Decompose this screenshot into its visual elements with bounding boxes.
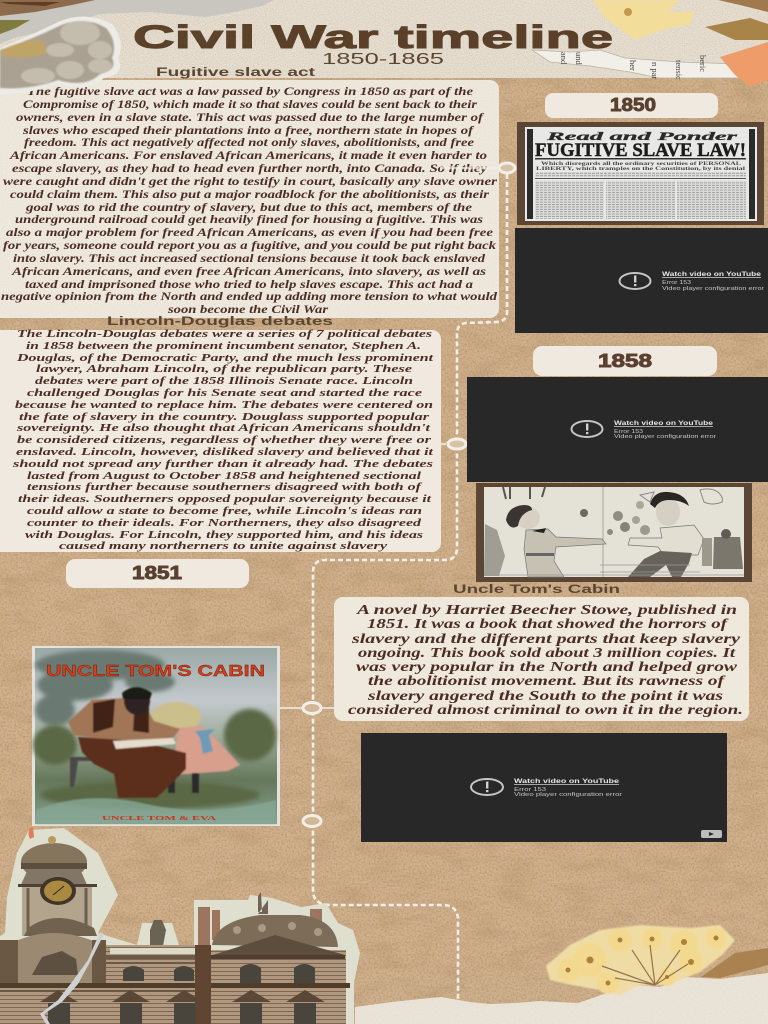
figure: Uncle Tom [68,687,186,798]
video embed: 1851 error: Video player configuration error [514,792,622,798]
text block: fugitive slave act body: The fugitive slave act was a law passed by Congress in 1850 as part of the [27,86,473,98]
video embed: 1850 error [515,228,768,333]
year label: 1851 [66,559,249,588]
collage: torn print scrap: and [559,52,569,65]
heading: Uncle Tom's Cabin: Uncle Tom's Cabin [453,584,620,596]
video embed: 1851 error [361,733,727,842]
figure: Lincoln [628,492,704,577]
text block: fugitive slave act body: African Americans, and even free African Americans, into slavery, as well as [11,266,487,278]
image: fugitive slave law poster [517,122,764,225]
text block: Uncle Tom's Cabin body: the abolitionist movement. But its rawness of [368,673,726,688]
text block: fugitive slave act body [1,86,498,316]
image: fugitive slave law poster: FUGITIVE SLAVE LAW! [535,140,746,161]
panel: fugitive slave act [0,67,500,318]
collage: torn print scrap [532,50,740,80]
text block: fugitive slave act body: goal was to rid the country of slavery, but due to this act, members of the [25,202,472,214]
text block: Lincoln-Douglas body: Douglas, of the Democratic Party, and the much less prominent [16,352,434,364]
torn paper header background [0,0,768,78]
image: Lincoln and Douglas boxing cartoon [476,483,752,582]
text block: Lincoln-Douglas body: sovereignty. He also thought that African Americans shouldn't [16,422,431,434]
sketch: crowd and spectators [484,501,744,575]
text block: Lincoln-Douglas body: The Lincoln-Douglas debates were a series of 7 political debates [17,328,432,340]
text block: Lincoln-Douglas body: in 1858 between the prominent incumbent senator, Stephen A. [26,340,421,352]
text block: fugitive slave act body: escape slavery, as they had to head even further north, into Canada. So if they [12,163,488,175]
text block: Uncle Tom's Cabin body: considered almost criminal to own it in the region. [348,702,743,717]
text block: Uncle Tom's Cabin body: A novel by Harriet Beecher Stowe, published in [356,602,737,617]
text block: fugitive slave act body: also a major problem for freed African Americans, as even if you had been free [6,227,493,239]
poster title: UNCLE TOM'S CABIN [46,663,265,680]
right pavilion [212,915,338,947]
text block: fugitive slave act body: negative opinion from the North and ended up adding more tension to what would [1,291,497,303]
text block: Lincoln-Douglas body: caused many northerners to unite against slavery [59,540,387,552]
icon: YouTube play button [701,830,722,838]
subtitle: date range: 1850-1865 [322,51,444,68]
text block: Lincoln-Douglas body: their ideas. Southerners opposed popular sovereignty because it [18,493,432,505]
video embed: 1851 error: Error 153 [514,787,546,793]
video embed: 1850 error: Watch video on YouTube [662,271,761,278]
text block: Lincoln-Douglas body: lasted from August to October 1858 and heightened sectional [27,470,422,482]
timeline node 1850 [499,163,515,173]
building windows [48,964,316,1024]
building paper cut-out [0,828,360,1024]
text block: fugitive slave act body: into slavery. This act increased sectional tensions because it took back enslaved [13,253,485,265]
chimneys [198,907,322,945]
text block: Lincoln-Douglas body: lawyer, Abraham Lincoln, of the republican party. These [36,363,412,375]
timeline node 1851 [303,702,321,714]
poster bench [70,757,110,787]
video embed: 1850 error: Video player configuration error [662,286,764,292]
text block: fugitive slave act body: underground railroad could get heavily fined for housing a fugitive. This was [15,214,484,226]
left wing [0,945,205,1024]
collage: brown leaf top-right [705,18,768,40]
text block: fugitive slave act body: were caught and didn't get the right to testify in court, basically any slave owner [3,176,498,188]
text block: Lincoln-Douglas body: could allow a state to become free, while Lincoln's ideas ran [27,505,422,517]
heading: fugitive slave act: Fugitive slave act [156,67,315,79]
text block: fugitive slave act body: freedom. This act negatively affected not only slaves, abolitionists, and free [24,137,474,149]
title: Civil War timeline [133,19,613,55]
collage: pressed flowers bottom-right [546,925,768,995]
text block: fugitive slave act body: soon become the Civil War [167,304,329,316]
collage: torn print scrap: her [628,60,638,71]
collage: dried flower top-right [593,0,768,40]
timeline connector: dashed path with nodes [280,163,515,1002]
poster tree foliage [35,650,175,726]
text block: Lincoln-Douglas body: debates were part of the 1858 Illinois Senate race. Lincoln [35,375,413,387]
collage: city hall building [0,827,360,1024]
text block: fugitive slave act body: African Americans. For enslaved African Americans, it made it even harder to [9,150,487,162]
collage: torn print scrap: n par [650,62,660,79]
text block: fugitive slave act body: slaves who escaped their plantations into a free, northern state in hopes of [22,125,474,137]
collage: torn print scrap: tensic [674,60,684,80]
text block: Lincoln-Douglas body [12,328,434,552]
statue [150,920,166,946]
text block: Lincoln-Douglas body: the fate of slavery in the country. Douglass supported popular [19,411,430,423]
text block: Lincoln-Douglas body: should not spread any further than it already had. The debates [12,458,433,470]
icon: alert [471,779,503,795]
poster ground foliage [33,709,276,809]
video embed: 1858 error: Error 153 [614,429,643,435]
image: fugitive slave law poster: Read and Ponder [545,129,738,143]
collage: torn print scrap: und [574,52,584,66]
collage: torn paper bottom [355,973,768,1024]
figure: Eva [151,702,240,793]
text block: Lincoln-Douglas body: enslaved. Lincoln, however, disliked slavery and believed that it [16,446,434,458]
icon: alert [572,421,602,437]
collage: top-left torn paper [0,0,274,44]
text block: Uncle Tom's Cabin body: slavery and the different parts that keep slavery [351,631,741,646]
clock tower [18,836,97,936]
video embed: 1858 error: Video player configuration error [614,434,716,440]
panel: Uncle Tom's Cabin text [334,597,749,721]
figure: Douglas [506,505,606,577]
text block: Uncle Tom's Cabin body [348,602,743,717]
image: Uncle Tom's Cabin poster [32,646,280,826]
panel: Lincoln-Douglas debates [0,316,441,552]
poster caption: UNCLE TOM & EVA [102,815,217,822]
text block: Uncle Tom's Cabin body: 1851. It was a book that showed the horrors of [367,616,729,631]
flag scrap [28,827,34,839]
video embed: 1850 error: Error 153 [662,280,691,286]
timeline node 1858 [448,439,466,449]
video embed: 1858 error: Watch video on YouTube [614,420,713,427]
year label: 1851: 1851 [132,563,182,583]
video embed: 1851 error: Watch video on YouTube [514,778,619,785]
text block: fugitive slave act body: for years, someone could report you as a fugitive, and you could be put right back [3,240,496,252]
collage: orange paper scrap [720,42,768,87]
text block: Lincoln-Douglas body: because he wanted to replace him. The debates were centered on [15,399,433,411]
text block: Lincoln-Douglas body: tensions further because southerners disagreed with both of [27,481,423,493]
year label: 1850 [545,93,718,118]
year label: 1858 [533,346,717,376]
text block: fugitive slave act body: owners, even in a slave state. This act was passed due to the large number of [16,112,485,124]
text block: fugitive slave act body: Compromise of 1850, which made it so that slaves could be sent back to their [23,99,478,111]
year label: 1850: 1850 [610,95,656,115]
text block: fugitive slave act body: could claim them. This also put a major roadblock for the abolitionists, as their [10,189,490,201]
timeline node lower [303,816,321,826]
text block: Uncle Tom's Cabin body: was very popular in the North and helped grow [356,659,738,674]
icon: alert [620,273,650,289]
video embed: 1858 error [467,377,768,482]
image: fugitive slave law poster: Which disregards all the ordinary securities of PERSONAL [541,161,741,167]
text block: Lincoln-Douglas body: challenged Douglas for his Senate seat and started the race [27,387,422,399]
torn white crack [40,932,104,1024]
image: fugitive slave law poster: LIBERTY, which tramples on the Constitution, by its denial [536,166,746,172]
year label: 1858: 1858 [598,351,652,371]
text block: Lincoln-Douglas body: with Douglas. For Lincoln, they supported him, and his ideas [25,529,423,541]
text block: Lincoln-Douglas body: be considered citizens, regardless of whether they were free or [17,434,432,446]
collage: torn print scrap: beric [698,55,708,72]
text block: Uncle Tom's Cabin body: ongoing. This book sold about 3 million copies. It [358,645,737,660]
text block: Uncle Tom's Cabin body: slavery angered the South to the point it was [367,688,723,703]
heading: Lincoln-Douglas debates: Lincoln-Douglas debates [107,316,333,328]
text block: fugitive slave act body: taxed and imprisoned those who tried to help slaves escape. This act had a [25,279,473,291]
text block: Lincoln-Douglas body: counter to their ideals. For Northerners, they also disagreed [27,517,422,529]
brown leaf [701,948,768,978]
collage: dried flower top-left [0,16,121,94]
